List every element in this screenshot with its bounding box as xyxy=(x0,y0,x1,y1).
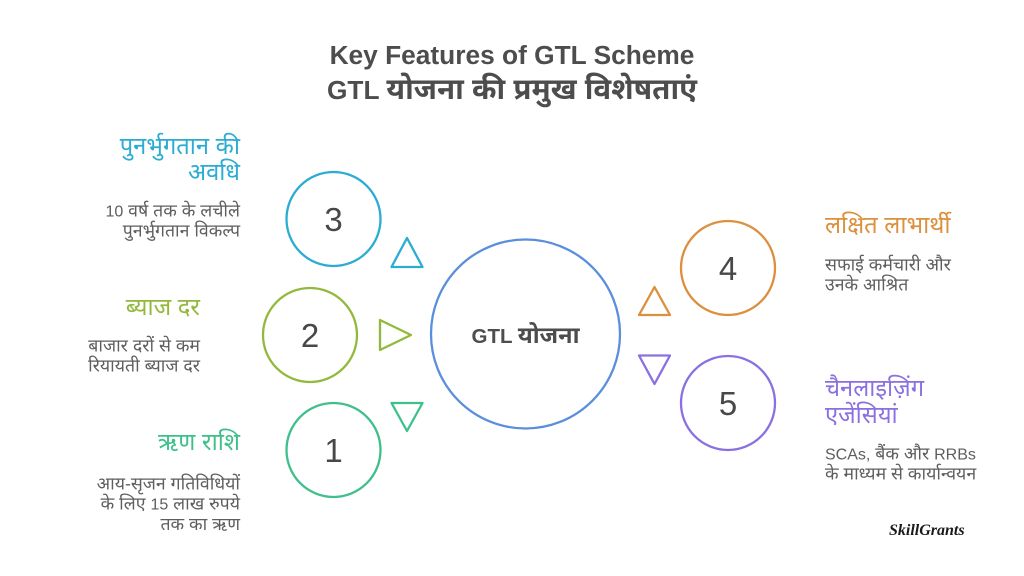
text: repayment description: 10 वर्ष तक के लचीले xyxy=(105,200,241,220)
circle 4 xyxy=(681,221,775,315)
text: agencies description xyxy=(825,444,977,484)
panel: item 2 interest rate xyxy=(88,288,411,382)
text: beneficiaries description: सफाई कर्मचारी और xyxy=(825,254,952,274)
heading: interest rate: ब्याज दर xyxy=(126,295,201,321)
circle 1 xyxy=(286,403,380,497)
circle 4: 4 xyxy=(719,250,737,287)
panel: item 3 repayment period xyxy=(105,132,422,267)
panel: item 4 target beneficiaries xyxy=(639,211,952,315)
text: interest description: रियायती ब्याज दर xyxy=(88,356,201,376)
text: repayment description xyxy=(105,200,241,242)
text: loan description: आय-सृजन गतिविधियों xyxy=(97,474,240,496)
text: beneficiaries description xyxy=(825,254,952,294)
heading: agencies: चैनलाइज़िंग xyxy=(825,374,925,402)
text: loan description xyxy=(97,474,241,534)
central circle: GTL योजना: GTL योजना xyxy=(472,321,581,348)
panel: item 5 channelizing agencies xyxy=(639,356,977,484)
text: agencies description: SCAs, बैंक और RRBs xyxy=(825,444,976,464)
arrow: triangle green right xyxy=(380,320,411,350)
arrow: triangle blue xyxy=(392,238,422,267)
heading: repayment period: अवधि xyxy=(188,158,240,186)
heading: repayment period xyxy=(120,132,241,186)
logo: SkillGrants: SkillGrants xyxy=(889,522,965,539)
title xyxy=(327,40,698,107)
circle 5 xyxy=(681,356,775,450)
heading: agencies: एजेंसियां xyxy=(825,401,899,429)
text: beneficiaries description: उनके आश्रित xyxy=(825,274,909,294)
title: Key Features of GTL Scheme xyxy=(330,40,694,70)
text: repayment description: पुनर्भुगतान विकल्प xyxy=(123,220,241,242)
circle 1: 1 xyxy=(324,432,343,469)
text: agencies description: के माध्यम से कार्यान्वयन xyxy=(825,462,977,484)
central circle: GTL योजना xyxy=(431,240,620,428)
heading: beneficiaries: लक्षित लाभार्थी xyxy=(825,211,952,239)
circle 3 xyxy=(286,172,380,266)
arrow: triangle orange xyxy=(639,287,670,315)
text: loan description: तक का ऋण xyxy=(160,514,241,534)
arrow: triangle purple down xyxy=(639,356,670,384)
circle 2: 2 xyxy=(301,317,319,354)
heading: repayment period: पुनर्भुगतान की xyxy=(120,132,241,161)
circle 5: 5 xyxy=(719,385,737,422)
text: interest description: बाजार दरों से कम xyxy=(88,334,200,356)
text: interest description xyxy=(88,334,201,376)
circle 3: 3 xyxy=(324,201,343,238)
text: loan description: के लिए 15 लाख रुपये xyxy=(101,492,241,514)
arrow: triangle teal down xyxy=(392,403,422,431)
heading: loan amount: ऋण राशि xyxy=(158,428,241,456)
title: GTL योजना की प्रमुख विशेषताएं xyxy=(327,72,698,107)
panel: item 1 loan amount xyxy=(97,403,422,534)
circle 2 xyxy=(263,288,357,382)
heading: agencies xyxy=(825,374,925,429)
